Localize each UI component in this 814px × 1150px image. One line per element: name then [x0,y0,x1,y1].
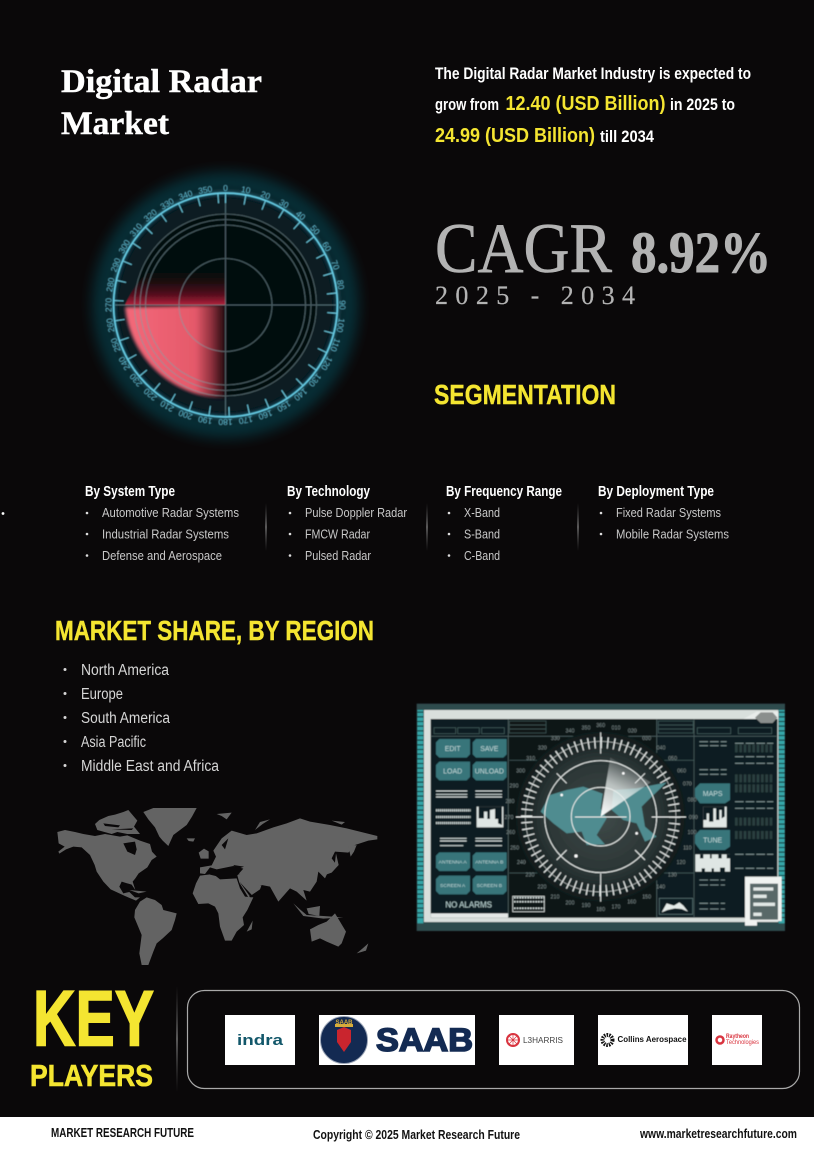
segment: by frequency range: C-Band [464,548,500,563]
dial bearing labels: 210 [551,894,559,900]
icon: radar scope: 100 [335,317,347,333]
segment: by technology: Pulse Doppler Radar [305,505,408,520]
icon: radar scope: 130 [307,372,324,389]
segment: by deployment type: By Deployment Type [598,484,714,500]
dial bearing labels: 300 [516,768,525,774]
segment: by frequency range: S-Band [464,526,500,542]
dial bearing labels: 160 [627,899,636,905]
dial bearing labels: 240 [517,860,526,866]
icon: radar scope: 80 [335,279,347,290]
dial bearing labels: 080 [688,798,696,804]
logo: saab: SAAB [376,1022,473,1058]
icon: radar scope: 140 [292,386,309,403]
dial bearing labels: 170 [612,904,620,910]
icon: radar scope: 180 [218,417,233,427]
radar console image [417,704,785,931]
logo: Raytheon Technologies: Raytheon [726,1034,749,1040]
dial bearing labels: 250 [510,845,519,851]
dial bearing labels: 040 [657,745,665,751]
dial bearing labels: 320 [538,745,547,751]
icon: radar scope: 110 [328,337,342,353]
dial bearing labels: 010 [612,725,620,731]
logo: Raytheon Technologies: Technologies [726,1040,759,1046]
segment: by technology: By Technology [287,484,370,500]
market forecast text [435,65,751,147]
footer: Copyright © 2025 Market Research Future [313,1128,520,1142]
icon: radar scope: 200 [177,408,194,422]
icon: radar scope: 10 [240,184,252,196]
icon: radar scope: 230 [127,371,144,389]
icon: radar scope: 120 [319,355,335,372]
market forecast text: 24.99 (USD Billion) [435,124,595,147]
region list [64,662,219,775]
icon: radar scope: 20 [259,189,272,201]
logo: Raytheon Technologies [712,1015,762,1065]
market forecast text: 12.40 (USD Billion) [506,92,666,115]
icon: radar scope: 70 [329,259,342,271]
dial bearing labels [505,723,698,913]
logo: L3Harris [499,1015,574,1065]
radar console image: ANTENNA B [475,860,504,866]
radar console image: MAPS [703,791,723,798]
dial bearing labels: 130 [668,872,677,878]
dial bearing labels: 280 [506,799,514,805]
dial bearing labels: 220 [538,885,546,891]
radar console image: SAVE [480,746,499,753]
segment: by frequency range [446,484,562,563]
radar console image: SCREEN A [440,883,466,889]
radar console image: TUNE [703,838,723,845]
icon: radar scope: 60 [320,240,334,253]
dial bearing labels: 120 [677,860,685,866]
logo: Collins Aerospace [598,1015,688,1065]
dial bearing labels: 340 [566,729,574,735]
segment: by technology: FMCW Radar [305,526,371,542]
icon: radar scope: 220 [141,386,159,403]
title: Market [61,106,169,142]
stray bullet [2,512,4,515]
icon: radar scope: 30 [277,197,291,211]
key players heading: PLAYERS [30,1058,153,1093]
radar console image: ANTENNA A [439,860,467,866]
radar console image: EDIT [445,746,461,753]
dial bearing labels: 070 [683,782,692,788]
segment: by deployment type: Mobile Radar Systems [616,526,729,542]
radar dial [516,732,686,902]
icon: radar scope: 260 [104,317,116,333]
segment: by system type [85,484,239,563]
region list: Asia Pacific [81,734,146,751]
logo: indra [225,1015,295,1065]
CAGR figure [435,210,771,310]
dial bearing labels: 140 [656,885,665,891]
radar console image: LOAD [443,769,462,776]
region list: South America [81,710,170,727]
segment: by system type: Defense and Aerospace [102,548,222,563]
logo: L3Harris: L3HARRIS [523,1036,563,1045]
icon: radar scope: 40 [294,208,308,222]
market forecast text: in 2025 to [670,96,735,114]
icon: radar scope: 280 [104,277,116,293]
segment: by system type: Automotive Radar Systems [102,505,239,520]
dial bearing labels: 020 [628,729,637,735]
radar console image: SCREEN B [477,883,503,889]
dial bearing labels: 180 [596,907,605,913]
dial bearing labels: 100 [688,830,696,836]
dial bearing labels: 190 [582,903,590,909]
dial bearing labels: 350 [582,725,590,731]
market forecast text: till 2034 [600,128,655,146]
region list: Europe [81,686,123,703]
segment: by deployment type: Fixed Radar Systems [616,505,721,520]
logo: indra: indra [237,1032,284,1049]
dial bearing labels: 030 [642,736,651,742]
segment: by technology [287,484,408,563]
icon: radar scope: 170 [238,414,254,426]
CAGR figure: 8.92% [631,220,771,285]
dial bearing labels: 200 [566,900,574,906]
icon: radar scope: 90 [338,300,348,310]
icon: radar scope: 270 [104,298,114,312]
icon: radar scope: 210 [158,398,176,414]
radar console image: UNLOAD [475,769,504,776]
market share heading: MARKET SHARE, BY REGION [55,615,374,646]
footer: MARKET RESEARCH FUTURE [51,1126,194,1140]
title: Digital Radar [61,64,262,100]
icon: radar scope: 320 [142,207,159,224]
world map [57,808,377,965]
icon: radar scope: 190 [197,414,213,426]
logo: saab [319,1015,475,1065]
logo: Collins Aerospace: Collins Aerospace [618,1035,687,1044]
icon: radar scope: 310 [127,221,144,238]
icon: radar scope: 350 [197,184,213,196]
radar console image: NO ALARMS [445,900,492,910]
icon: radar scope: 150 [275,398,293,414]
dial bearing labels: 230 [526,872,534,878]
segment: by technology: Pulsed Radar [305,548,372,563]
region list: Middle East and Africa [81,758,219,775]
segment: by system type: By System Type [85,484,175,500]
console buttons [436,739,730,894]
dial bearing labels: 290 [510,783,518,789]
region list: North America [81,662,169,679]
icon: radar scope: 160 [257,408,274,422]
CAGR figure: 2025 - 2034 [435,281,635,310]
segment: by frequency range: By Frequency Range [446,484,562,500]
icon: radar scope: 330 [158,196,176,212]
footer [0,1117,814,1150]
icon: radar scope: 0 [223,183,228,193]
dial bearing labels: 330 [551,736,560,742]
dial bearing labels: 270 [505,815,513,821]
dial bearing labels: 310 [526,756,535,762]
dial bearing labels: 060 [677,768,686,774]
key players heading: KEY [33,974,154,1062]
console gauges and readouts [436,742,782,926]
CAGR figure: CAGR [435,210,613,288]
icon: radar scope: 240 [116,355,132,372]
market forecast text: The Digital Radar Market Industry is expected to [435,65,751,83]
dial bearing labels: 090 [689,815,698,821]
dial bearing labels: 260 [506,830,515,836]
segment: by system type: Industrial Radar Systems [102,526,229,542]
segment: by frequency range: X-Band [464,505,500,520]
icon: radar scope: 50 [308,223,322,237]
dial bearing labels: 110 [683,845,692,851]
icon: radar scope [104,183,348,427]
icon: radar scope: 340 [177,188,194,202]
key players heading [30,974,154,1093]
icon: radar scope: 300 [116,238,132,255]
logo: saab: SAAB [335,1020,353,1026]
title [61,64,262,142]
dial bearing labels: 150 [642,894,651,900]
segment: by deployment type [598,484,729,542]
key players panel [188,990,800,1088]
dial bearing labels: 360 [596,723,605,729]
market forecast text: grow from [435,96,499,114]
icon: radar scope: 290 [108,256,123,273]
icon: radar scope: 250 [108,336,123,353]
dial bearing labels: 050 [668,756,677,762]
segmentation heading: SEGMENTATION [434,379,616,410]
